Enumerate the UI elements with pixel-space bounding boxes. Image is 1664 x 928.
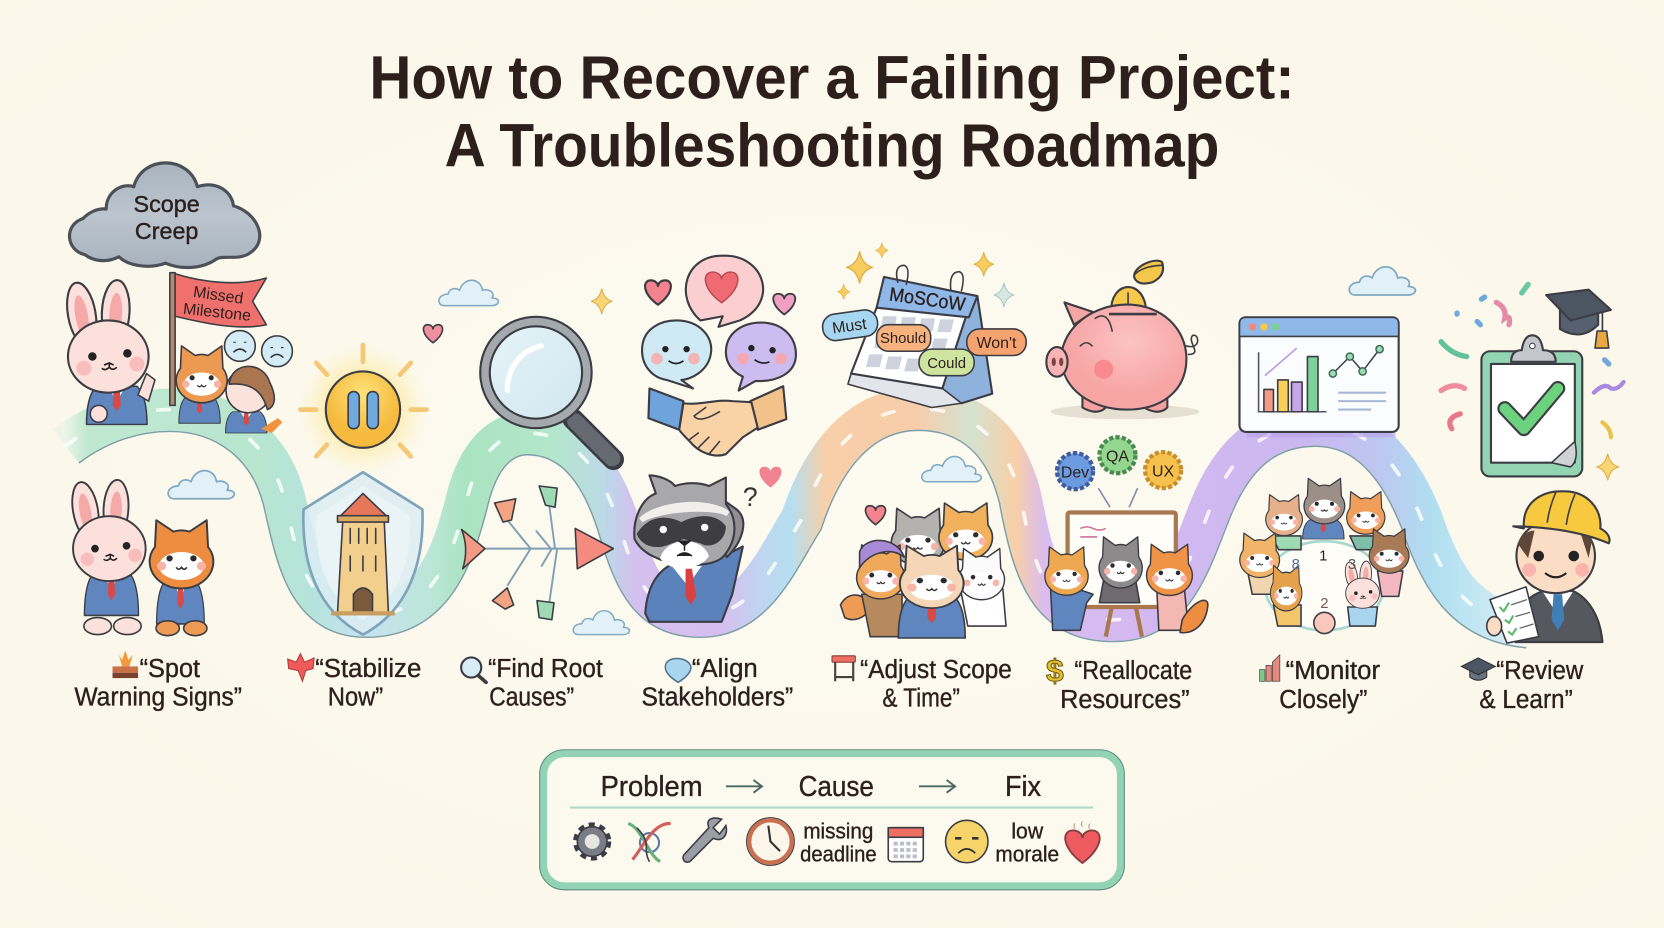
icon: broken clock bbox=[747, 818, 794, 865]
text: low morale: morale bbox=[995, 842, 1059, 867]
title: A Troubleshooting Roadmap bbox=[445, 112, 1219, 181]
icon: heart bbox=[1065, 821, 1100, 863]
clipboard with check bbox=[1481, 335, 1582, 476]
flag: missed milestone: Missed bbox=[192, 284, 244, 308]
icon: pause sun bbox=[297, 344, 429, 475]
step label: find root causes: Causes” bbox=[489, 684, 574, 712]
step label: review and learn: “Review bbox=[1496, 657, 1584, 685]
step label: stabilize now: “Stabilize bbox=[315, 655, 421, 683]
winding road bbox=[66, 409, 1528, 626]
step label: monitor closely: Closely” bbox=[1279, 686, 1367, 714]
dashboard window bbox=[1239, 317, 1399, 433]
step label: adjust scope and time: “Adjust Scope bbox=[860, 656, 1012, 684]
moscow calendar: Won't bbox=[977, 335, 1017, 352]
step label: spot warning signs: Warning Signs” bbox=[74, 684, 242, 712]
graduation cap bbox=[1546, 290, 1611, 348]
whiteboard with presenters bbox=[1045, 513, 1208, 637]
step label: monitor closely: “Monitor bbox=[1286, 657, 1381, 685]
moscow calendar: MoSCoW bbox=[888, 284, 967, 316]
skill badges: QA bbox=[1106, 449, 1129, 466]
fishbone diagram bbox=[462, 486, 613, 620]
step label: spot warning signs: “Spot bbox=[140, 655, 200, 683]
rabbit and fox in suits bbox=[68, 479, 213, 636]
step label: adjust scope and time: & Time” bbox=[882, 685, 960, 713]
icon: calendar bbox=[888, 828, 923, 862]
flag: missed milestone bbox=[170, 273, 266, 405]
icon: speech balloon bbox=[665, 658, 691, 682]
skill badges: Dev bbox=[1061, 465, 1089, 482]
cloud: scope creep: Scope bbox=[134, 191, 200, 217]
legend header: Cause bbox=[799, 771, 874, 803]
moscow calendar: Could bbox=[927, 356, 966, 372]
engineer with hard hat bbox=[1487, 491, 1610, 643]
small cloud bbox=[439, 280, 498, 306]
small cloud bbox=[573, 611, 629, 635]
icon: easel bbox=[832, 656, 855, 681]
small cloud bbox=[168, 471, 234, 499]
step label: find root causes: “Find Root bbox=[488, 655, 603, 683]
legend header: Problem bbox=[601, 771, 703, 803]
group of cats bbox=[840, 503, 1006, 638]
moscow calendar bbox=[821, 243, 1026, 407]
step label: reallocate resources bbox=[1046, 652, 1192, 714]
small cloud bbox=[922, 456, 981, 482]
text: low morale: low bbox=[1011, 818, 1044, 843]
moscow calendar: Must bbox=[831, 316, 868, 337]
icon: wrench bbox=[683, 818, 726, 862]
sparkle bbox=[591, 289, 612, 314]
piggy bank bbox=[1046, 261, 1199, 419]
text: missing deadline bbox=[800, 818, 877, 867]
legend header bbox=[601, 771, 1042, 803]
cloud: scope creep: Creep bbox=[135, 218, 198, 244]
legend panel: problem cause fix bbox=[540, 750, 1124, 890]
step label: find root causes bbox=[461, 655, 603, 712]
step label: review and learn bbox=[1461, 657, 1584, 714]
team around clock: 8 bbox=[1292, 557, 1300, 573]
moscow calendar: Should bbox=[880, 331, 926, 347]
icon: dollar sign: $ bbox=[1046, 652, 1064, 688]
icon: tangled wires bbox=[628, 823, 671, 862]
heart bbox=[423, 325, 443, 343]
text: low morale bbox=[995, 818, 1059, 867]
icon: gear bbox=[577, 827, 607, 856]
step label: spot warning signs bbox=[74, 651, 242, 712]
team around clock: 1 bbox=[1319, 548, 1327, 564]
title bbox=[369, 44, 1295, 181]
rabbit in suit on hilltop bbox=[63, 279, 155, 424]
step label: adjust scope and time bbox=[832, 656, 1012, 713]
cloud: scope creep bbox=[69, 163, 260, 268]
confetti bbox=[1441, 284, 1624, 480]
icon: sad face bbox=[946, 820, 988, 863]
step label: reallocate resources: Resources” bbox=[1060, 686, 1190, 714]
icon: cap bbox=[1461, 658, 1495, 680]
step label: monitor closely bbox=[1260, 655, 1381, 714]
step label: reallocate resources: “Reallocate bbox=[1074, 657, 1192, 685]
icon: bar chart bbox=[1260, 655, 1280, 681]
step label: align stakeholders: “Align bbox=[692, 655, 758, 683]
step label: stabilize now: Now” bbox=[328, 684, 383, 712]
small cloud bbox=[1349, 267, 1415, 295]
step label: review and learn: & Learn” bbox=[1479, 686, 1573, 714]
confused raccoon bbox=[634, 467, 781, 622]
title: How to Recover a Failing Project: bbox=[369, 44, 1295, 113]
text: missing deadline: deadline bbox=[800, 842, 877, 867]
team around clock: 3 bbox=[1348, 557, 1356, 573]
icon: warning bbox=[113, 651, 138, 678]
skill badges: UX bbox=[1152, 463, 1175, 480]
stakeholder speech bubbles bbox=[642, 256, 796, 391]
confused raccoon: ? bbox=[743, 482, 758, 512]
cat and colleague with sad bubbles bbox=[176, 331, 292, 433]
step label: align stakeholders bbox=[642, 655, 793, 712]
flag: missed milestone: Milestone bbox=[182, 301, 252, 325]
text: missing deadline: missing bbox=[803, 818, 873, 843]
team around clock bbox=[1240, 478, 1409, 634]
step label: stabilize now bbox=[288, 654, 421, 712]
skill badges bbox=[1057, 437, 1181, 507]
icon: magnifier bbox=[461, 657, 486, 682]
magnifying glass bbox=[485, 322, 613, 459]
team around clock: 2 bbox=[1320, 596, 1329, 612]
step label: align stakeholders: Stakeholders” bbox=[642, 684, 793, 712]
handshake bbox=[648, 386, 786, 456]
shield with tower bbox=[303, 472, 423, 635]
icon: stabilize bbox=[288, 654, 314, 681]
legend header: Fix bbox=[1005, 771, 1042, 803]
